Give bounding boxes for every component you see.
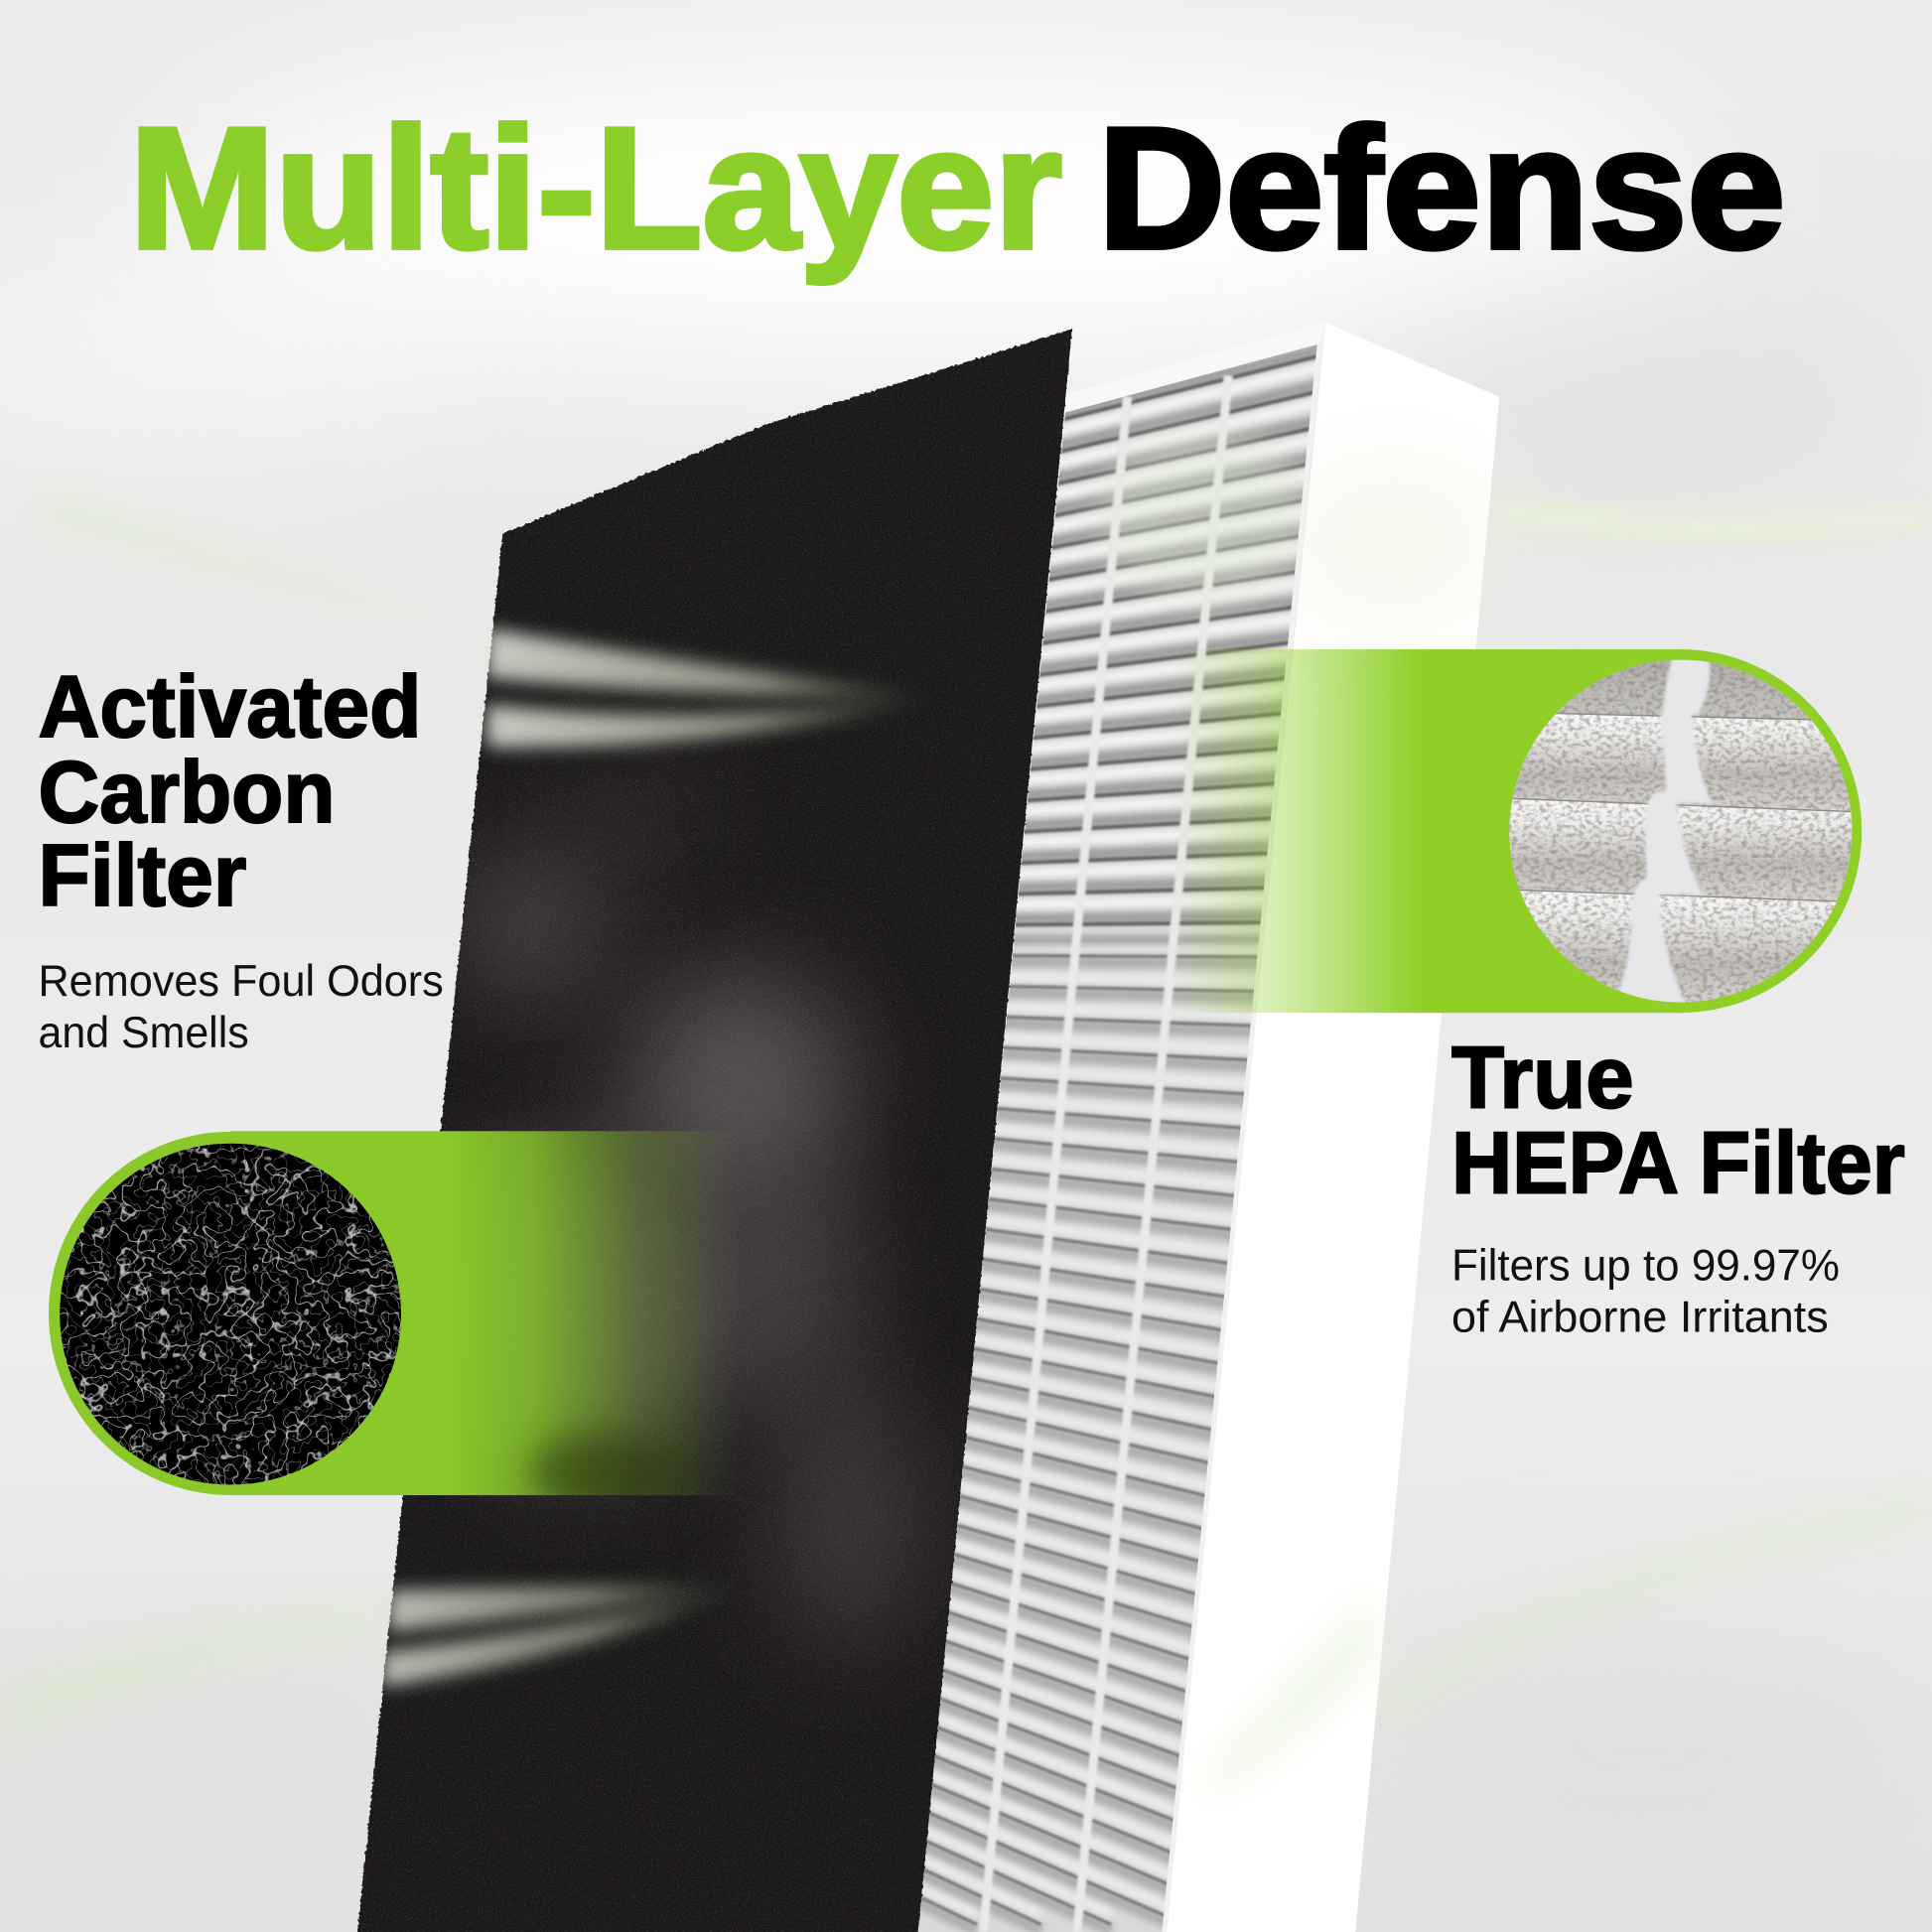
heading: Activated Carbon Filter: Filter: [38, 826, 246, 924]
title: Multi-Layer: [129, 91, 1062, 284]
callout: carbon filter band and close-up: [49, 1131, 740, 1512]
text: carbon filter description: Removes Foul Odors: [38, 957, 444, 1006]
heading: Activated Carbon Filter: Activated: [38, 657, 421, 756]
text: carbon filter description: [38, 957, 444, 1057]
text: HEPA filter description: [1451, 1241, 1840, 1342]
green circle end: [49, 1132, 412, 1495]
callout: HEPA filter band and close-up: [1171, 649, 1862, 1013]
heading: True HEPA Filter: HEPA Filter: [1451, 1113, 1905, 1211]
text: HEPA filter description: Filters up to 99.97%: [1451, 1241, 1840, 1290]
airflow streaks on carbon, upper: [486, 628, 930, 748]
HEPA pleated filter face: [918, 345, 1317, 1932]
heading: Activated Carbon Filter: Carbon: [38, 743, 336, 841]
green band fading into filter: [1171, 649, 1682, 1013]
heading: True HEPA Filter: True: [1451, 1029, 1634, 1127]
top and side rim of filter frame: [1064, 322, 1325, 1932]
green band fading into carbon: [230, 1131, 740, 1495]
activated carbon filter sheet: [345, 321, 1084, 1932]
heading: Activated Carbon Filter: [38, 657, 421, 924]
title: Defense: [1098, 91, 1785, 284]
green circle end: [1498, 649, 1862, 1013]
airflow streaks on carbon, lower: [382, 1587, 737, 1687]
dark shadow in band: [530, 1433, 678, 1512]
white side face of HEPA filter frame: [1165, 323, 1503, 1932]
close-up of carbon fibers: [56, 1140, 407, 1491]
title: [129, 91, 1785, 284]
close-up of HEPA media: [1503, 653, 1861, 1011]
text: HEPA filter description: of Airborne Irritants: [1451, 1294, 1829, 1342]
text: carbon filter description: and Smells: [38, 1009, 249, 1057]
heading: True HEPA Filter: [1451, 1029, 1905, 1211]
